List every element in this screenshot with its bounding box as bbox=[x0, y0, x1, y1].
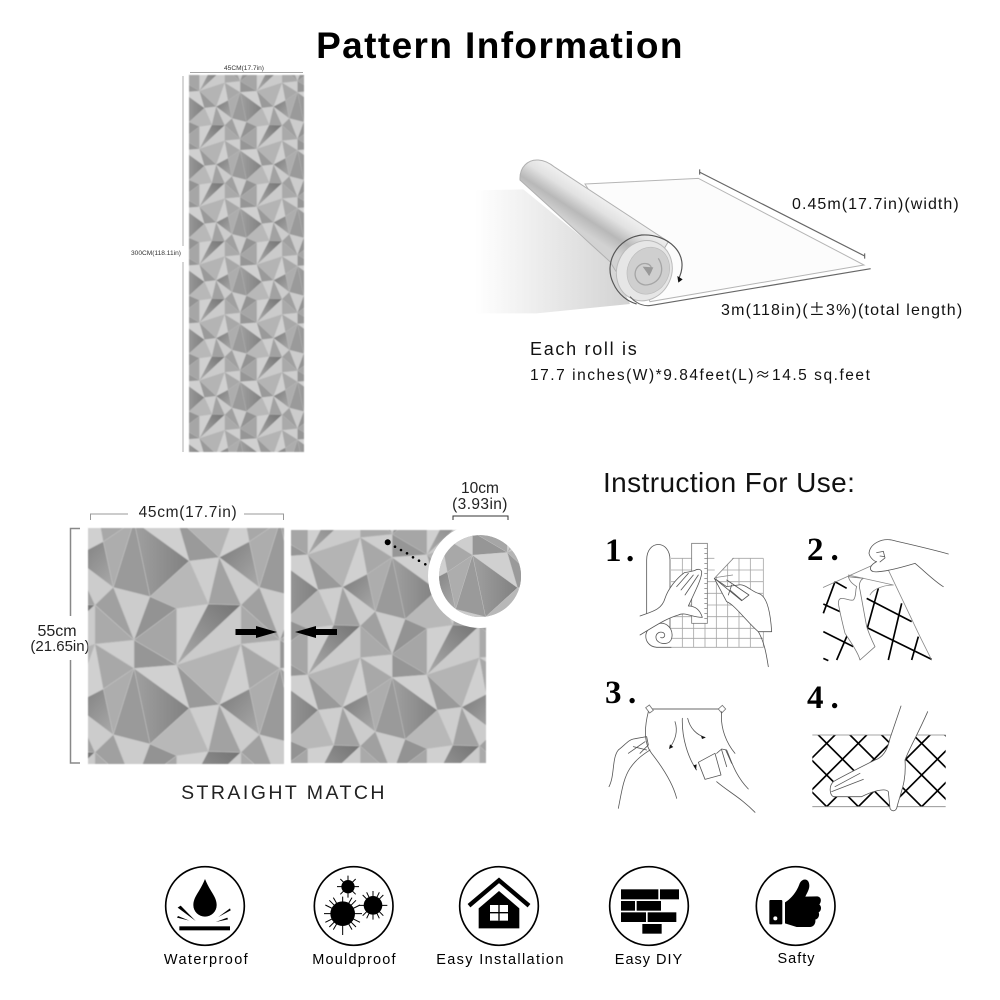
feature: easy DIY bbox=[610, 867, 688, 968]
magnifier dotted leader bbox=[385, 539, 427, 566]
10cm dimension: (3.93in) bbox=[452, 496, 508, 513]
label: easy DIY: Easy DIY bbox=[615, 952, 683, 968]
width dimension 45cm: 45cm(17.7in) bbox=[139, 504, 237, 521]
icon: thumbs up bbox=[756, 867, 835, 945]
width dimension line bbox=[699, 169, 865, 259]
step 3 illustration bbox=[609, 705, 755, 812]
step number 2: 2. bbox=[807, 532, 846, 568]
height dimension 55cm bbox=[30, 528, 90, 763]
length dimension line bbox=[630, 269, 871, 306]
icon: bricks bbox=[610, 867, 688, 945]
label: total length: 3m(118in)(±3%)(total length) bbox=[721, 296, 963, 320]
label: width: 0.45m(17.7in)(width) bbox=[792, 196, 960, 213]
strip height dimension: 300CM(118.11in) bbox=[131, 250, 181, 257]
left pattern sheet bbox=[0, 349, 426, 816]
height dimension 55cm: 55cm bbox=[37, 623, 77, 640]
icon: mould spores bbox=[314, 867, 393, 945]
sheet of wallpaper bbox=[585, 178, 864, 302]
10cm dimension: 10cm bbox=[461, 480, 499, 497]
caption: straight match: STRAIGHT MATCH bbox=[181, 782, 387, 804]
icon: water drop bbox=[166, 867, 244, 945]
icon: house bbox=[460, 867, 538, 945]
roll end cap bbox=[607, 231, 682, 310]
step 2 illustration bbox=[823, 540, 948, 661]
panel: roll illustration bbox=[467, 160, 871, 313]
step number 3: 3. bbox=[605, 675, 643, 711]
step 4 bbox=[807, 686, 946, 812]
width dimension 45cm bbox=[90, 504, 284, 521]
right pattern sheet bbox=[241, 417, 630, 798]
label: mouldproof: Mouldproof bbox=[312, 952, 397, 968]
label: safty: Safty bbox=[777, 951, 816, 967]
roll body bbox=[520, 160, 668, 300]
step 1 bbox=[605, 533, 772, 667]
step number 1: 1. bbox=[605, 533, 639, 569]
label: each roll is: Each roll is bbox=[530, 339, 638, 359]
step 2 bbox=[807, 532, 948, 661]
feature: safty bbox=[756, 867, 835, 967]
label: easy installation: Easy Installation bbox=[436, 952, 565, 968]
floor shadow bbox=[467, 189, 630, 313]
panel: full roll pattern strip bbox=[131, 25, 355, 498]
step 1 illustration bbox=[640, 543, 772, 667]
step 3 bbox=[605, 675, 755, 812]
heading: instruction: Instruction For Use: bbox=[603, 467, 855, 498]
arrow: right sheet bbox=[295, 626, 337, 638]
height dimension 55cm: (21.65in) bbox=[30, 638, 90, 655]
magnified pattern circle bbox=[439, 535, 521, 617]
strip width dimension bbox=[190, 65, 303, 72]
step number 4: 4. bbox=[807, 680, 846, 716]
feature: waterproof bbox=[164, 867, 249, 968]
strip width dimension: 45CM(17.7in) bbox=[224, 65, 264, 72]
step 4 illustration bbox=[812, 706, 946, 812]
label: roll size: 17.7 inches(W)*9.84feet(L)≈14.5 sq.feet bbox=[530, 363, 871, 385]
arrow: left sheet bbox=[236, 626, 277, 638]
feature: easy installation bbox=[436, 867, 565, 968]
magnifier white ring bbox=[428, 524, 532, 628]
title: Pattern Information bbox=[316, 25, 684, 66]
10cm dimension bbox=[452, 480, 508, 520]
feature: mouldproof bbox=[312, 867, 397, 968]
label: waterproof: Waterproof bbox=[164, 952, 249, 968]
feature row bbox=[164, 867, 835, 968]
panel: straight match bbox=[31, 482, 521, 799]
strip pattern bbox=[167, 25, 355, 498]
rotation arrow bbox=[610, 235, 683, 304]
